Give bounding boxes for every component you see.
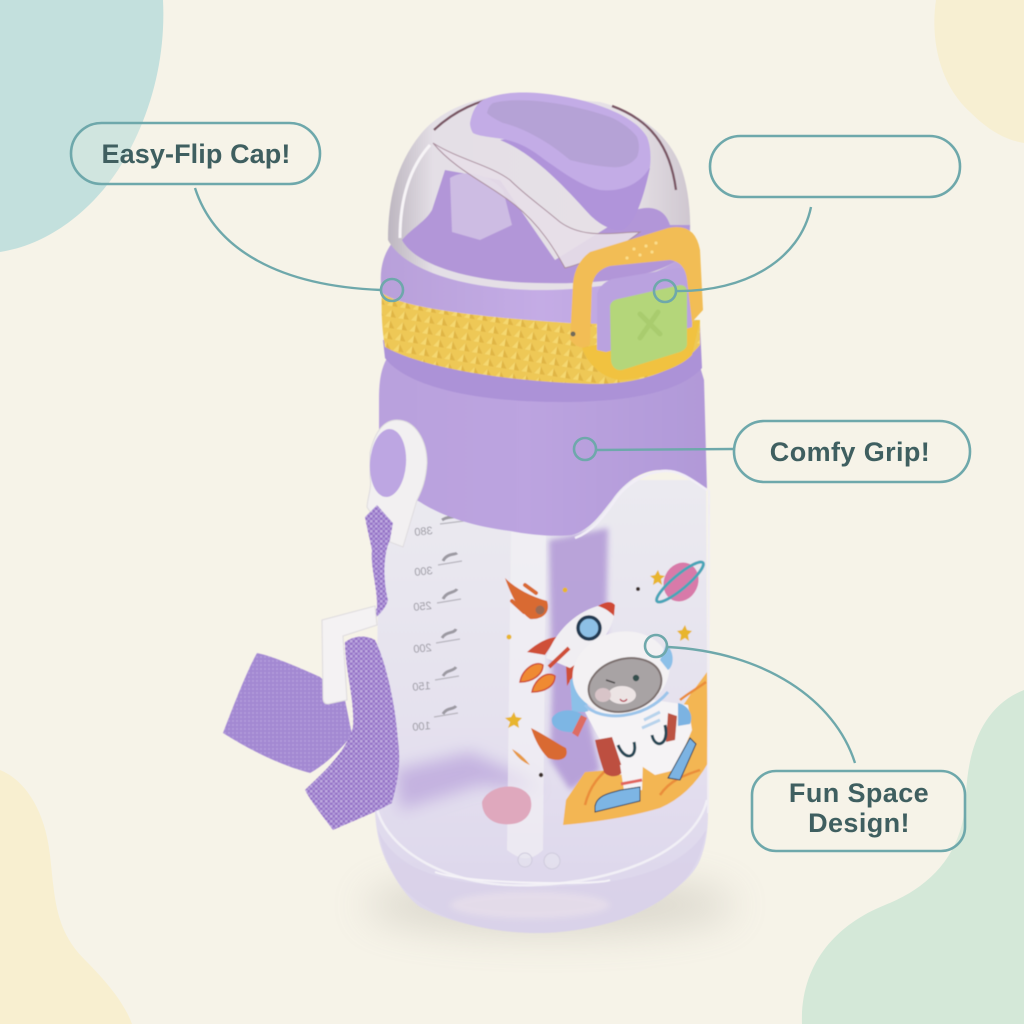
wavy clear rim highlight <box>575 471 707 538</box>
callout: comfy grip <box>574 421 970 482</box>
yellow band <box>382 293 700 384</box>
comet upper head <box>536 606 544 614</box>
moon surface <box>563 672 708 825</box>
clip button <box>368 428 408 498</box>
callout: comfy grip: Comfy Grip! <box>770 437 930 467</box>
measurement scale: 250 <box>413 600 432 614</box>
grip: purple sleeve with wavy edge <box>379 360 707 536</box>
strap: rear loop <box>223 653 352 773</box>
bottle body: clear lower section <box>375 480 708 933</box>
helmet side <box>660 645 673 670</box>
frosted base <box>378 830 706 933</box>
comet lower <box>531 728 567 760</box>
handle grip dots <box>625 241 658 260</box>
band latch: yellow lower ring <box>582 320 700 380</box>
lower collar ledge <box>383 325 702 402</box>
straw <box>507 530 546 858</box>
bottle shadow <box>365 877 735 933</box>
dome left edge <box>400 145 430 238</box>
measurement scale: 200 <box>413 642 432 656</box>
blob: top left teal <box>0 0 163 252</box>
collar <box>381 240 700 325</box>
inner lid highlight <box>450 173 512 240</box>
life-support hoses <box>618 725 666 756</box>
space decal <box>482 557 708 825</box>
purple refraction at bottom <box>395 752 540 810</box>
latch frame: lilac clip <box>597 268 692 352</box>
comet upper <box>505 578 548 619</box>
right arm red <box>666 713 677 742</box>
dome rim shading <box>434 97 676 190</box>
hamster face <box>595 675 639 704</box>
callout: fun space design: Fun Space <box>789 778 929 808</box>
green button <box>610 285 687 370</box>
rocket <box>520 602 615 692</box>
planet: ringed <box>653 557 707 607</box>
callout: fun space design <box>645 635 965 851</box>
flip lever <box>470 93 651 230</box>
measurement scale: 380 <box>414 525 433 539</box>
inner strap seen through bottle <box>549 528 608 790</box>
left arm and glove <box>570 672 588 712</box>
comet upper sparks <box>512 585 536 612</box>
left cuff <box>572 715 587 737</box>
measurement scale: 100 <box>412 720 431 734</box>
water bottle illustration <box>223 93 709 933</box>
base highlight <box>450 891 610 919</box>
dome lid <box>388 94 690 290</box>
planet: pink <box>482 786 531 824</box>
clear straw mouthpiece <box>433 143 640 268</box>
callout: fun space design: Design! <box>808 808 910 838</box>
measurement scale: 300 <box>414 565 433 579</box>
base ring <box>376 800 707 885</box>
blob: top right yellow <box>934 0 1024 143</box>
right glove <box>678 703 691 726</box>
inner shell edge <box>708 490 709 813</box>
inner lid disc <box>402 170 690 283</box>
bottle interior details <box>376 516 707 933</box>
dots <box>539 587 640 777</box>
red upper leg <box>595 737 623 776</box>
yellow handle <box>570 227 703 348</box>
strap: thin upper <box>342 505 393 636</box>
side clip: lower white buckle <box>322 606 377 704</box>
moon streaks <box>585 682 706 805</box>
stars <box>505 570 692 728</box>
measurement scale <box>412 516 464 734</box>
handle pin <box>570 332 576 336</box>
callout: easy-flip cap <box>71 123 403 301</box>
callout: easy-flip cap: Easy-Flip Cap! <box>102 139 290 169</box>
measurement scale: 150 <box>412 680 431 694</box>
callout: empty label <box>654 136 960 302</box>
helmet <box>563 621 679 723</box>
strap: front loop <box>305 636 399 830</box>
right boot <box>668 738 696 780</box>
left boot <box>595 787 640 812</box>
blob: bottom left yellow <box>0 770 132 1024</box>
torso <box>585 698 692 775</box>
visor <box>583 650 667 720</box>
lower leg <box>620 762 643 790</box>
side clip: upper white buckle <box>367 420 427 547</box>
collar stripe <box>585 692 668 716</box>
astronaut <box>552 621 696 812</box>
blob: bottom right green <box>802 690 1024 1024</box>
comet small <box>512 749 530 765</box>
straw foot <box>518 853 560 869</box>
